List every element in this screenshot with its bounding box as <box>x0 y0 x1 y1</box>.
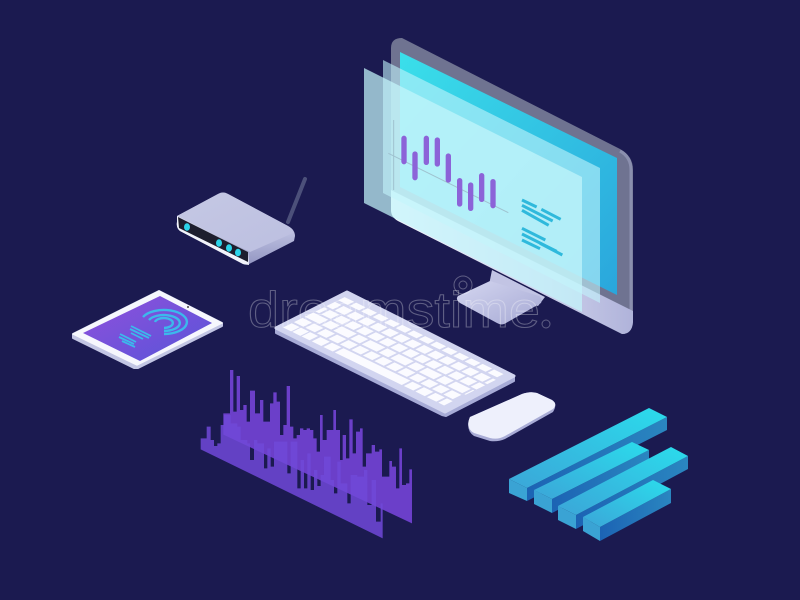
tablet camera <box>187 306 189 308</box>
bar 3 <box>558 447 688 529</box>
router white edge <box>177 216 249 265</box>
router lights <box>184 223 241 256</box>
screen text lines <box>522 200 562 255</box>
router antenna <box>288 179 305 222</box>
bar 4 <box>583 480 671 541</box>
router <box>177 179 305 265</box>
front glass pane <box>364 68 582 312</box>
monitor top highlight <box>620 151 631 312</box>
keyboard <box>276 292 514 416</box>
bar 2 <box>534 442 649 513</box>
front waveform layer <box>201 415 383 538</box>
purple waveform chart <box>201 370 412 538</box>
blue isometric bars <box>509 408 688 541</box>
fingerprint arcs <box>143 310 187 334</box>
mouse <box>468 392 555 441</box>
watermark: dreamstime <box>248 282 540 338</box>
tablet body <box>73 291 222 368</box>
bar 1 <box>509 408 667 501</box>
router front panel <box>178 217 248 262</box>
keyboard top <box>276 292 514 412</box>
tablet text lines <box>119 326 151 347</box>
keys <box>287 299 502 403</box>
tablet <box>73 291 222 368</box>
monitor chin <box>391 190 633 334</box>
candlestick chart <box>388 120 508 213</box>
middle glass pane <box>383 60 600 303</box>
desktop monitor <box>364 38 633 334</box>
tablet screen <box>83 296 212 361</box>
keyboard base <box>276 292 514 416</box>
monitor stand <box>457 270 545 324</box>
monitor bezel <box>391 38 633 334</box>
monitor screen <box>400 52 617 295</box>
back waveform layer <box>223 370 412 523</box>
router body <box>177 192 295 265</box>
